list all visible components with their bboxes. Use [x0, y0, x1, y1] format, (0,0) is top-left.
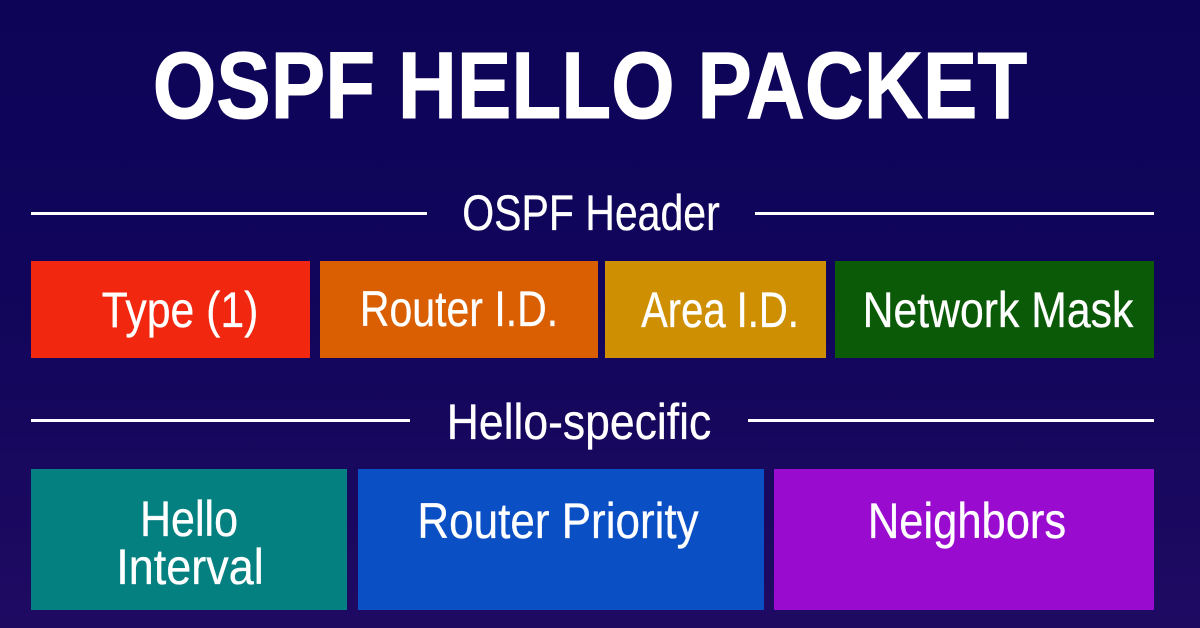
field: Router I.D.: Router I.D.	[360, 281, 558, 337]
field: Network Mask: Network Mask	[863, 282, 1133, 338]
field: Hello Interval	[31, 469, 347, 610]
field: Type (1)	[31, 261, 310, 358]
field: Router Priority	[358, 469, 764, 610]
field: Area I.D.	[605, 261, 826, 358]
field: Network Mask	[835, 261, 1154, 358]
field: Type (1): Type (1)	[102, 282, 258, 338]
heading: Hello-specific: Hello-specific	[447, 394, 711, 450]
field: Router I.D.	[320, 261, 598, 358]
field: Router Priority: Router Priority	[417, 493, 699, 549]
field: Hello Interval: Interval	[116, 539, 264, 595]
field: Neighbors	[774, 469, 1154, 610]
field: Hello Interval: Hello	[140, 491, 238, 547]
title: OSPF HELLO PACKET	[153, 33, 1027, 139]
heading: OSPF Header: OSPF Header	[462, 185, 720, 241]
field: Area I.D.: Area I.D.	[641, 282, 799, 338]
field: Neighbors: Neighbors	[868, 493, 1066, 549]
